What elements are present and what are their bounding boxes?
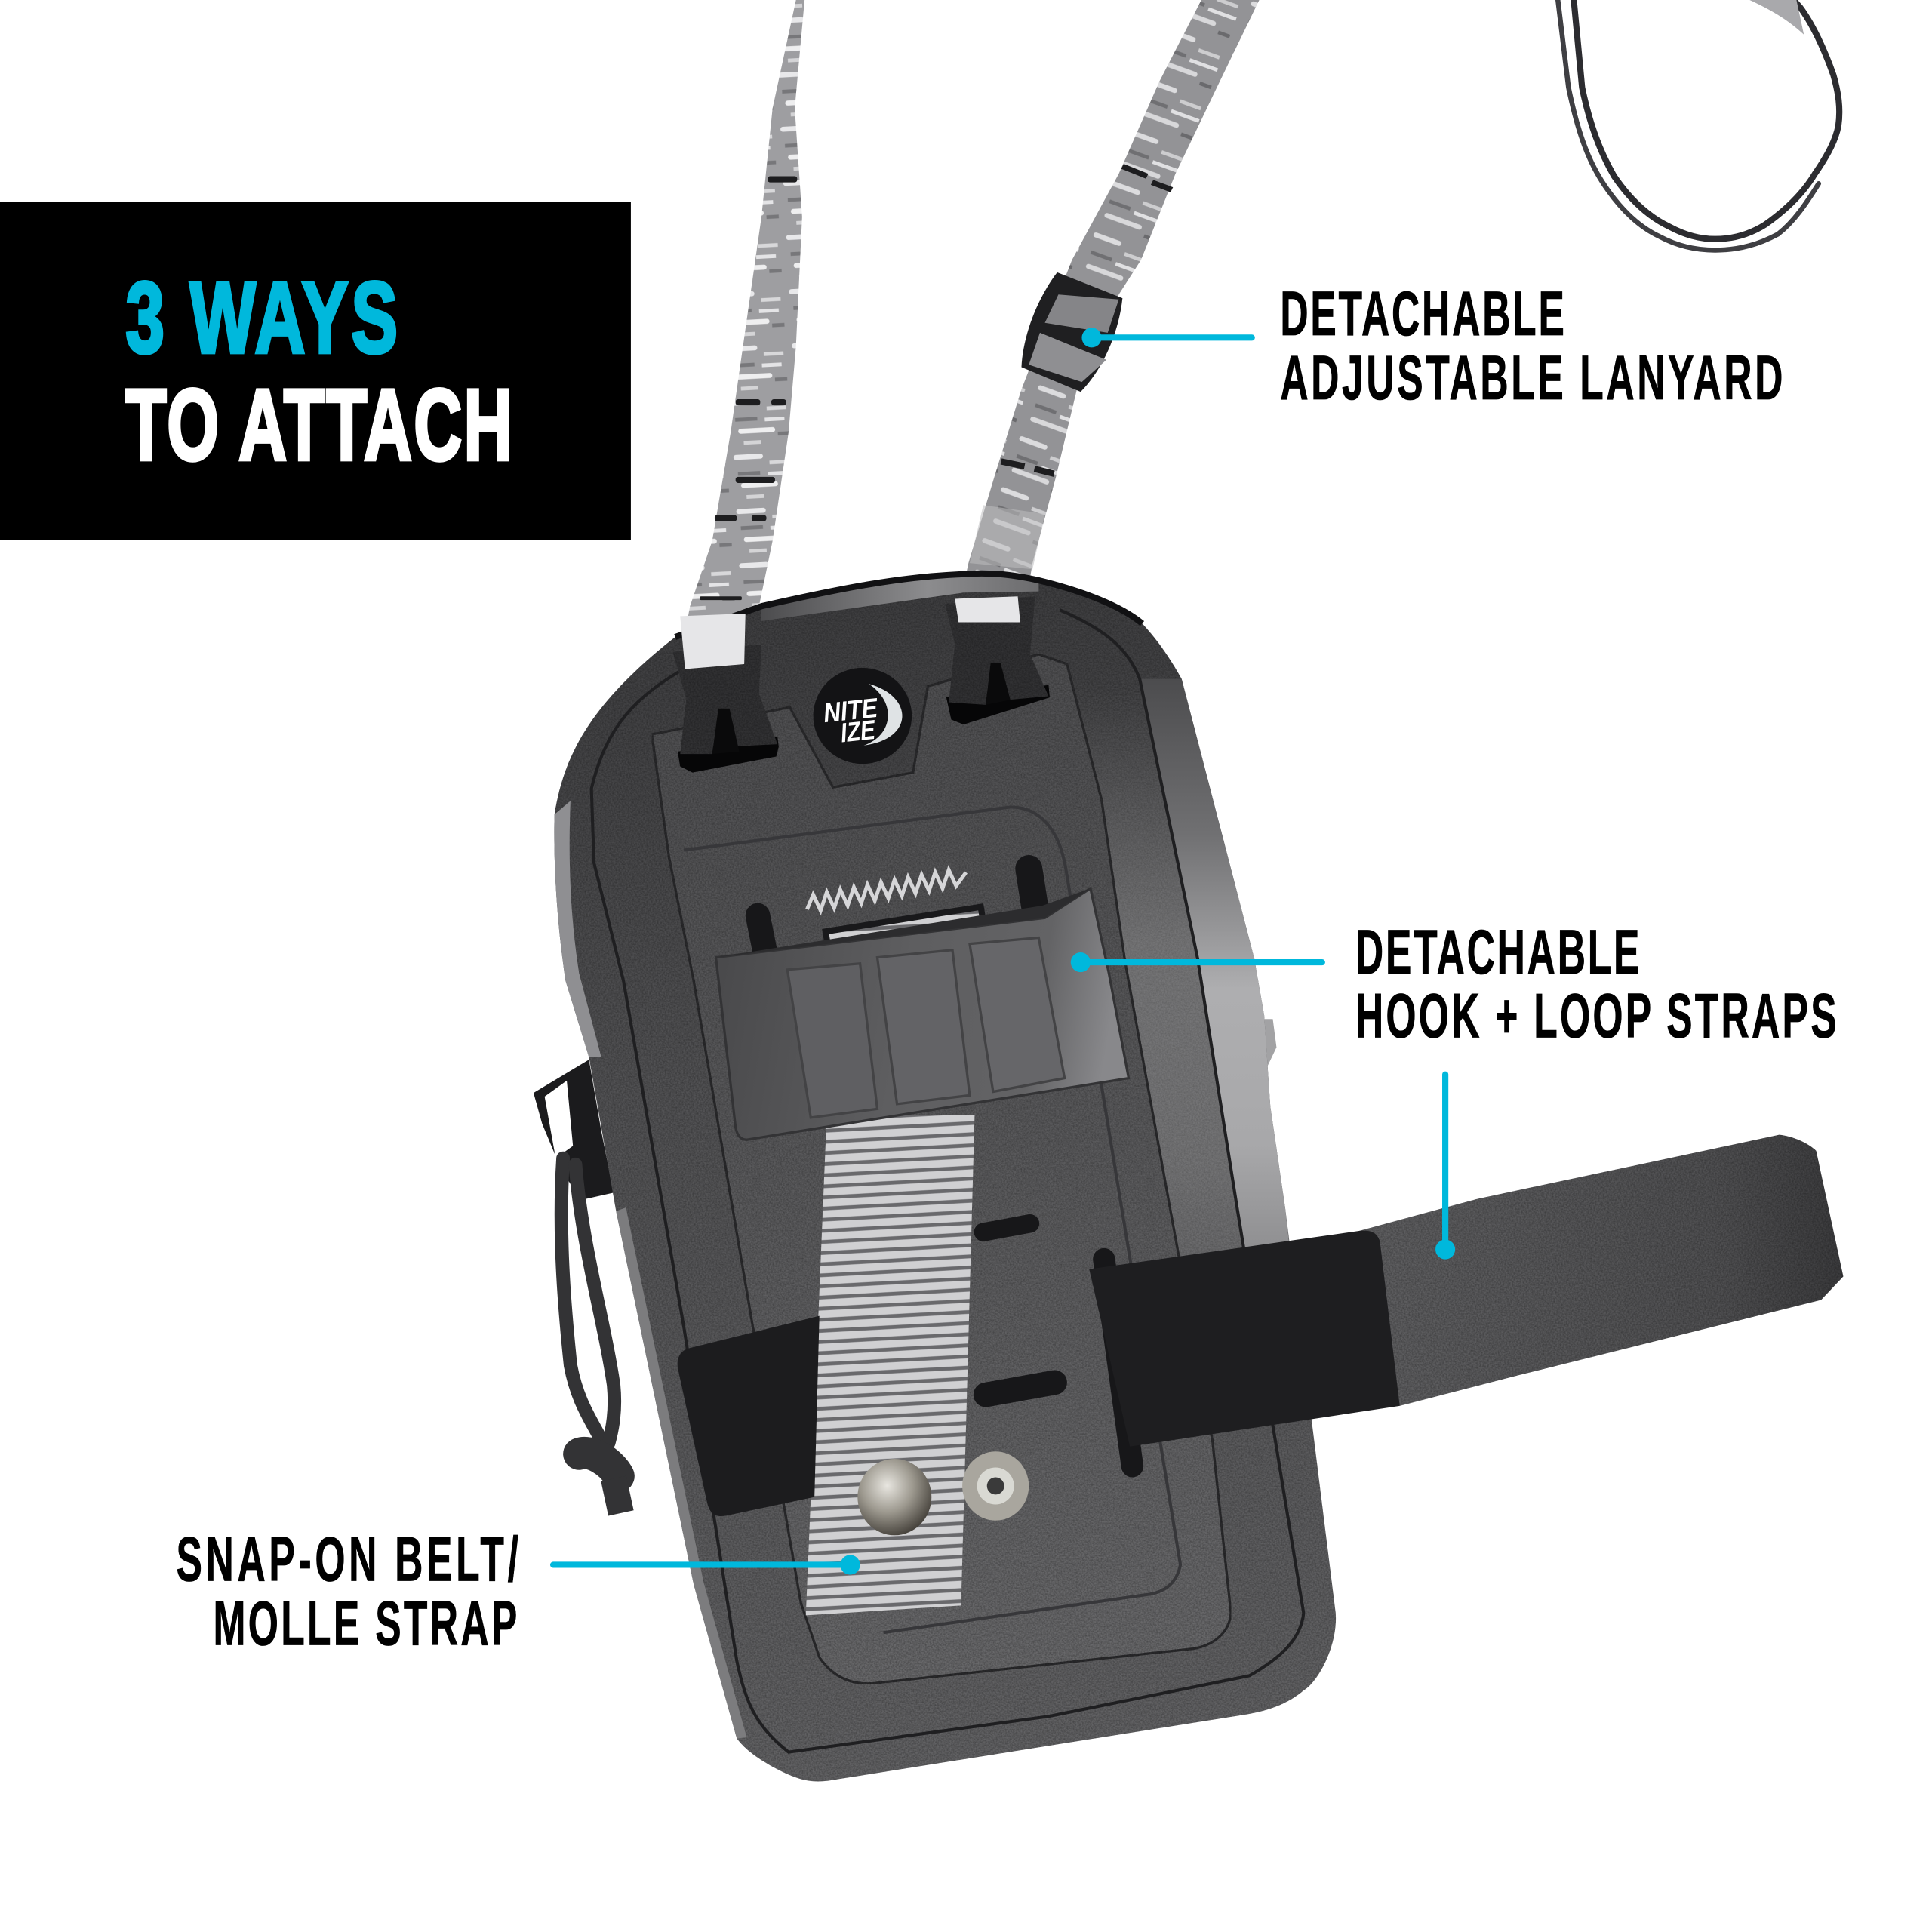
label text: DETACHABLE — [1280, 278, 1564, 349]
snap button — [857, 1459, 931, 1535]
label text: HOOK + LOOP STRAPS — [1355, 980, 1837, 1051]
logo crescent — [863, 684, 903, 746]
callout line — [1081, 328, 1252, 347]
left strap dark dashes — [700, 176, 797, 600]
lanyard detached loop — [1558, 0, 1839, 250]
right lanyard hook — [945, 596, 1050, 724]
callout line — [553, 1555, 860, 1575]
webbing snap strap — [806, 1115, 974, 1615]
side loop attachment — [534, 1019, 1276, 1200]
top dark seam — [675, 574, 1142, 637]
rigid strap clip — [716, 888, 1129, 1140]
strap plain tail — [1359, 1135, 1843, 1406]
callout: hook and loop straps — [1071, 916, 1837, 1260]
label text: MOLLE STRAP — [213, 1588, 517, 1659]
title line 2: TO ATTACH — [126, 369, 512, 481]
callout lines — [1071, 952, 1455, 1260]
callout: lanyard — [1081, 278, 1783, 413]
right side highlight — [1140, 679, 1309, 1417]
label text — [1355, 916, 1837, 1051]
top lip of pouch — [761, 574, 1038, 621]
label text — [1280, 278, 1783, 413]
right strap dark dashes — [1001, 164, 1173, 477]
zigzag stitching — [807, 870, 966, 911]
label text: SNAP-ON BELT/ — [176, 1524, 518, 1595]
label text — [176, 1524, 518, 1659]
lanyard adjuster buckle — [1021, 272, 1122, 392]
left lanyard hook — [672, 614, 779, 773]
hook and loop velcro patch — [1089, 1231, 1400, 1447]
elastic webbing behind clip — [826, 907, 988, 976]
stitched patch on right strap — [970, 505, 1044, 569]
clip slots — [758, 869, 1132, 1466]
logo text: NITE — [822, 692, 880, 728]
product: phone pouch — [534, 0, 1843, 1781]
left side highlight — [554, 801, 601, 1057]
label text: ADJUSTABLE LANYARD — [1280, 342, 1783, 413]
inner recess — [684, 807, 1180, 1632]
pouch rear body — [554, 574, 1336, 1781]
outer stitch line — [592, 610, 1303, 1752]
snap socket — [962, 1451, 1029, 1521]
left lanyard strap — [678, 0, 804, 672]
lower left edge — [616, 1208, 746, 1739]
pull cord — [561, 1158, 621, 1513]
right lanyard strap — [958, 0, 1260, 615]
label text: DETACHABLE — [1355, 916, 1639, 987]
title panel — [0, 202, 631, 540]
callout: snap-on strap — [176, 1524, 860, 1659]
logo badge: IZE — [839, 714, 877, 748]
logo badge — [814, 668, 912, 764]
hook and loop short tab — [678, 1316, 820, 1516]
title line 1: 3 WAYS — [126, 262, 398, 374]
right soft glow — [1072, 679, 1266, 1417]
rear plate — [652, 654, 1231, 1684]
